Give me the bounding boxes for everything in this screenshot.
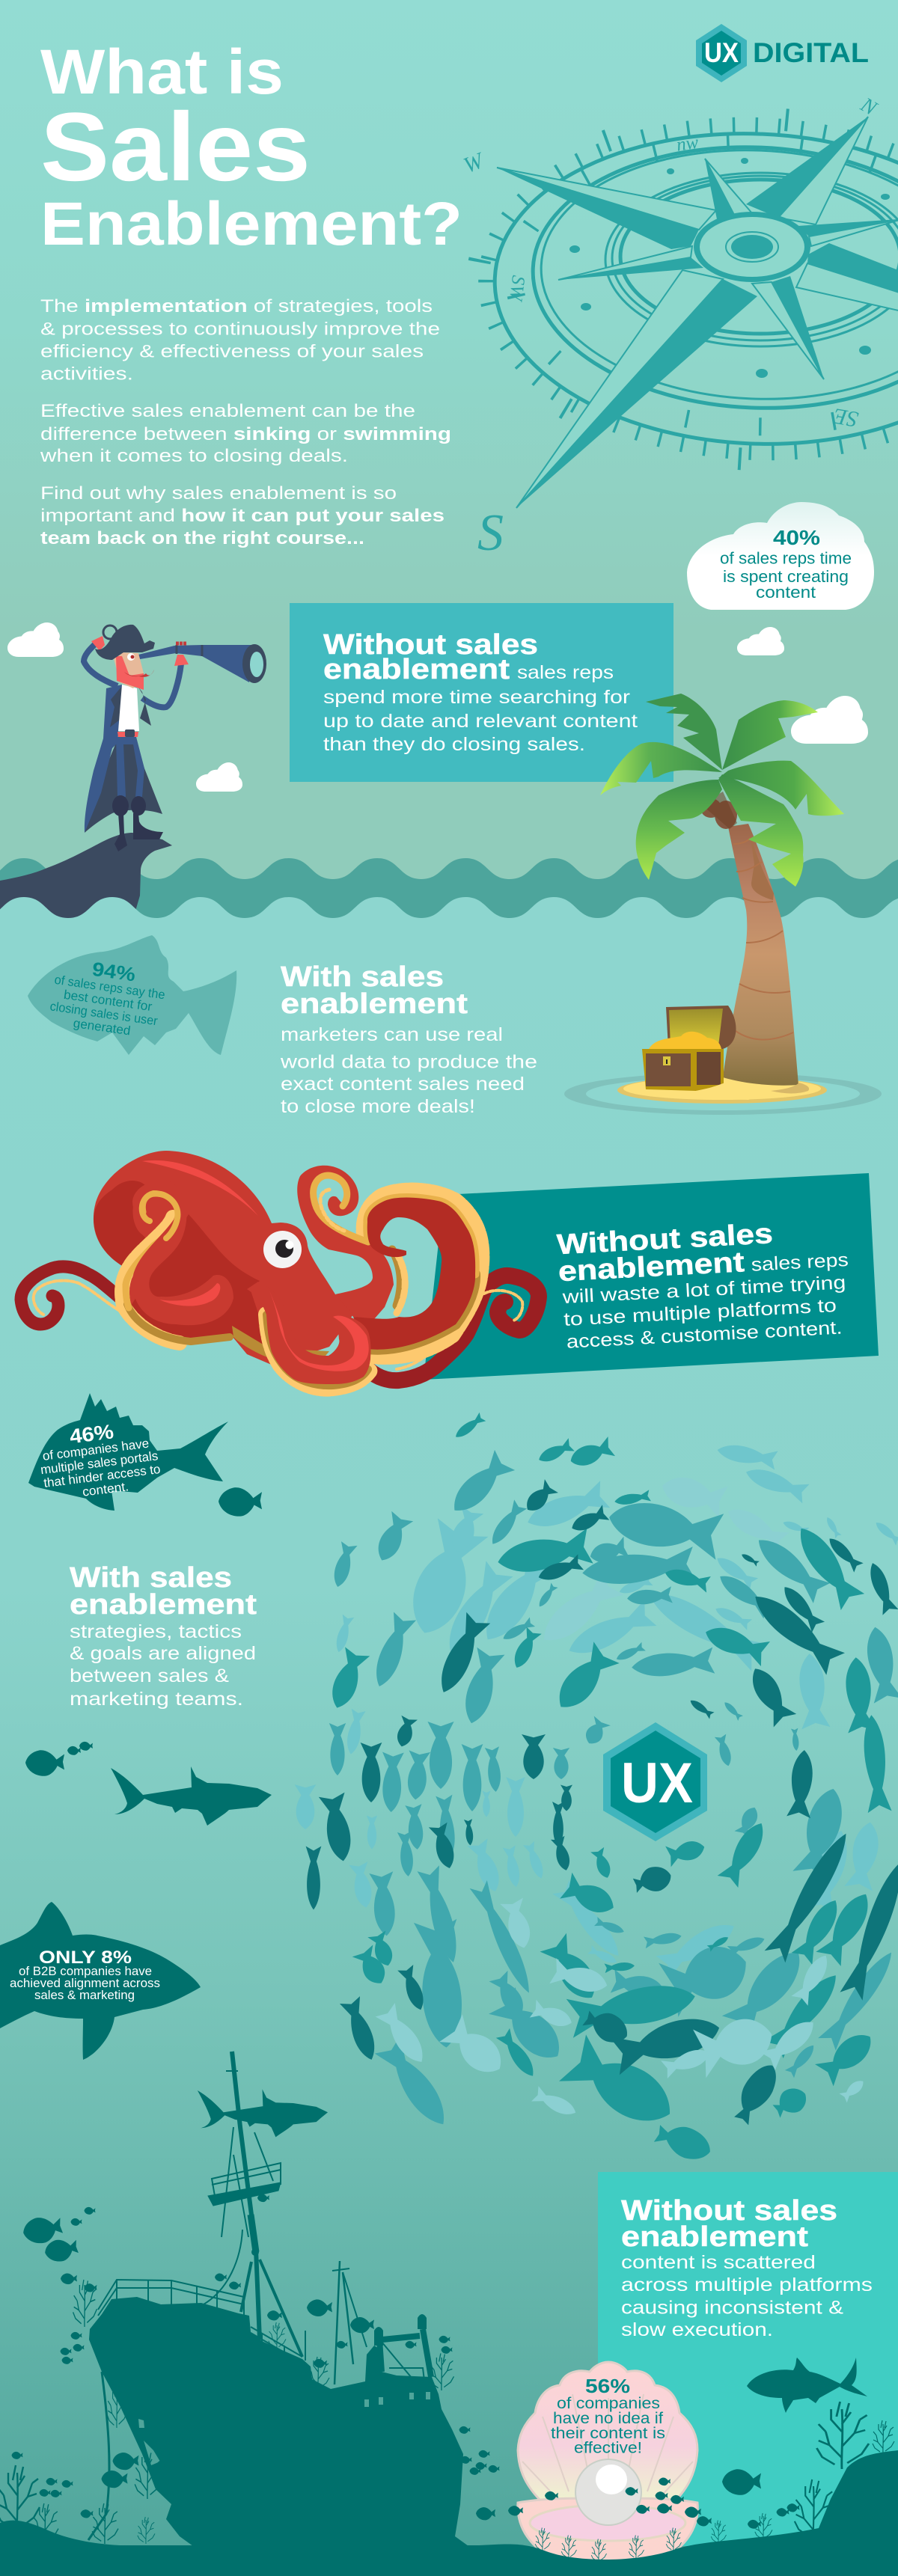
cloud stat: 40%: of sales reps time (720, 549, 852, 568)
octopus (21, 1151, 539, 1389)
panel: without sales enablement 3: enablement (621, 2221, 808, 2253)
panel: without sales enablement 2: access & customise content. (566, 1317, 843, 1353)
compass hub (694, 212, 810, 282)
coconuts (700, 798, 737, 829)
intro text: activities. (40, 364, 133, 385)
compass letters: S (477, 504, 504, 562)
head (94, 1151, 353, 1365)
corals (0, 2280, 894, 2563)
panel: without sales enablement 2: enablement (558, 1246, 745, 1288)
arms (84, 643, 117, 686)
hull (89, 2297, 468, 2546)
fish stat: 46% (28, 1393, 228, 1511)
coat (85, 743, 162, 833)
pearl clam shell: have no idea if (553, 2410, 663, 2427)
palm trunk (723, 824, 798, 1086)
intro text: Find out why sales enablement is so (40, 483, 397, 504)
panel: without sales enablement 2: to use multiple platforms to (563, 1295, 837, 1330)
face (114, 652, 144, 688)
small reef fish group (25, 1487, 262, 1776)
fish stat: 94%: 94% (91, 958, 137, 986)
panel: without sales enablement 1: Without sales (323, 629, 538, 661)
text: with sales enablement 2: between sales & (70, 1665, 229, 1686)
island ripple (564, 1073, 882, 1115)
intro text: when it comes to closing deals. (40, 446, 348, 466)
fish stat: 46%: of companies have (42, 1437, 150, 1463)
text: with sales enablement 1: enablement (281, 988, 468, 1020)
shirt and belt (118, 685, 139, 731)
text: with sales enablement 1: marketers can use real (281, 1024, 503, 1045)
superstructure posts (379, 2329, 431, 2377)
panel: without sales enablement 1: up to date and relevant content (323, 711, 638, 732)
title: What is (40, 37, 284, 107)
panel: without sales enablement 1: than they do closing sales. (323, 734, 585, 755)
background sky (0, 0, 898, 928)
tentacle: upper curl (297, 1166, 394, 1319)
title: Sales (40, 92, 311, 201)
compass letters: SE (831, 403, 860, 432)
pearl clam shell: their content is (551, 2425, 665, 2442)
pearl clam shell (518, 2362, 697, 2563)
compass rose (460, 93, 898, 562)
panel: without sales enablement 3: slow execution. (621, 2319, 773, 2340)
center UX hexagon: UX (621, 1752, 693, 1815)
compass letters: N (856, 93, 882, 120)
fish stat: only 8%: ONLY 8% (39, 1948, 132, 1968)
panel: without sales enablement 1: spend more time searching for (323, 687, 630, 708)
panel: without sales enablement 3: across multiple platforms (621, 2274, 873, 2295)
intro text: & processes to continuously improve the (40, 319, 440, 340)
legs and boots (116, 737, 144, 797)
treasure chest (642, 1006, 736, 1091)
tentacle: far left (21, 1267, 122, 1324)
cloud stat: 40%: content (756, 583, 816, 602)
intro text: team back on the right course... (40, 528, 364, 548)
pearl clam shell: of companies (557, 2395, 660, 2412)
fish stat: only 8%: achieved alignment across (10, 1976, 160, 1990)
compass dots (569, 158, 890, 378)
intro text: efficiency & effectiveness of your sales (40, 341, 424, 362)
fish stat: 94% (28, 935, 236, 1055)
railing (98, 2280, 302, 2363)
head shading (94, 1181, 299, 1358)
intro text: important and how it can put your sales (40, 506, 445, 526)
tentacle: big left loop (122, 1217, 180, 1343)
fish stat: 46%: multiple sales portals (40, 1448, 159, 1477)
small clouds (7, 622, 868, 792)
shark (111, 1766, 272, 1826)
compass dark half points (497, 117, 898, 508)
gold shadow of body (232, 1326, 329, 1358)
compass letters: W (460, 147, 489, 178)
rock under pirate (0, 833, 172, 928)
hull windows (138, 2392, 430, 2465)
text: with sales enablement 1 (280, 961, 537, 1117)
seabed and rocks (0, 2450, 898, 2576)
lower shell (518, 2498, 697, 2563)
small fish around the wreck (12, 2194, 799, 2529)
fish stat: only 8%: of B2B companies have (19, 1964, 152, 1978)
text: with sales enablement 2: marketing teams. (70, 1689, 243, 1710)
compass letters: SW (505, 275, 528, 303)
tentacle: lower right dark (367, 1276, 539, 1380)
upper shark (198, 2089, 328, 2137)
fish stat: only 8% (0, 1902, 201, 2060)
panel: without sales enablement 2: will waste a lot of time trying (561, 1272, 846, 1308)
text: with sales enablement 1: exact content sales need (281, 1074, 525, 1095)
text: with sales enablement 1: world data to produce the (280, 1052, 537, 1073)
panel: without sales enablement 1: sales reps (517, 662, 614, 683)
text: with sales enablement 2: & goals are aligned (70, 1643, 256, 1664)
panel: without sales enablement 2: Without sales (556, 1218, 774, 1261)
logo: UX Digital (696, 24, 869, 82)
title: Enablement? (40, 190, 462, 258)
intro text (40, 296, 451, 548)
intro text: Effective sales enablement can be the (40, 401, 415, 421)
shipwreck silhouette (88, 2052, 468, 2546)
background sea (0, 928, 898, 2576)
fish stat: 46%: 46% (68, 1420, 114, 1448)
panel: without sales enablement 3: causing inconsistent & (621, 2297, 843, 2318)
fish stat: 46%: content. (82, 1479, 129, 1499)
island with palm and chest (564, 694, 882, 1115)
telescope (138, 643, 266, 683)
pearl clam shell: 56% (585, 2375, 630, 2397)
compass light half points (497, 117, 898, 508)
fish stat: 94%: of sales reps say the (54, 973, 166, 1002)
tentacle: front middle (266, 1315, 370, 1389)
compass letters (460, 93, 882, 562)
fish stat: 94%: closing sales is user (49, 999, 159, 1028)
upper shell (518, 2362, 697, 2503)
intro text: The implementation of strategies, tools (40, 296, 433, 316)
panel: without sales enablement 3: Without sales (621, 2195, 837, 2227)
panel: without sales enablement 3: content is scattered (621, 2252, 816, 2273)
palm leaves (646, 694, 722, 770)
cloud stat: 40%: 40% (773, 526, 820, 549)
fish on panel (747, 2358, 867, 2413)
pirate with telescope (84, 625, 266, 851)
cloud stat: 40%: is spent creating (723, 567, 849, 586)
logo: UX Digital: UX (704, 37, 739, 68)
text: with sales enablement 1: to close more deals! (281, 1096, 475, 1117)
second mast (335, 2261, 353, 2384)
panel: without sales enablement 1: enablement (323, 654, 510, 685)
intro text: difference between sinking or swimming (40, 424, 451, 444)
text: with sales enablement 2: With sales (70, 1562, 232, 1594)
fish school (295, 1413, 898, 2165)
panel: without sales enablement 3 (598, 2172, 898, 2546)
fish stat: only 8%: sales & marketing (34, 1988, 135, 2002)
text: with sales enablement 2 (70, 1562, 257, 1710)
hat (95, 625, 155, 660)
left arm fill (132, 1180, 233, 1325)
title (40, 37, 462, 258)
center UX hexagon (603, 1722, 707, 1841)
fish stat: 94%: best content for (63, 988, 153, 1014)
eye (263, 1231, 302, 1268)
fish stat: 94%: generated (73, 1016, 132, 1038)
right loop arm fill (353, 1197, 475, 1350)
panel: without sales enablement 2 (424, 1173, 879, 1380)
text: with sales enablement 1: With sales (281, 961, 444, 993)
main mast (232, 2052, 260, 2340)
logo: UX Digital: DIGITAL (753, 37, 869, 68)
pearl clam shell: effective! (574, 2439, 642, 2457)
front wave water (0, 897, 898, 928)
cloud stat: 40% (687, 502, 874, 610)
compass letters: nw (675, 132, 700, 156)
panel: without sales enablement 2: sales reps (751, 1249, 849, 1276)
text: with sales enablement 2: enablement (70, 1589, 257, 1621)
panel: without sales enablement 1 (290, 603, 674, 782)
pearl (575, 2459, 641, 2525)
fish stat: 46%: that hinder access to (43, 1462, 161, 1490)
tentacle: right big loop gold (367, 1274, 475, 1350)
sand (617, 1077, 827, 1104)
back wave (0, 858, 898, 928)
text: with sales enablement 2: strategies, tactics (70, 1621, 242, 1642)
